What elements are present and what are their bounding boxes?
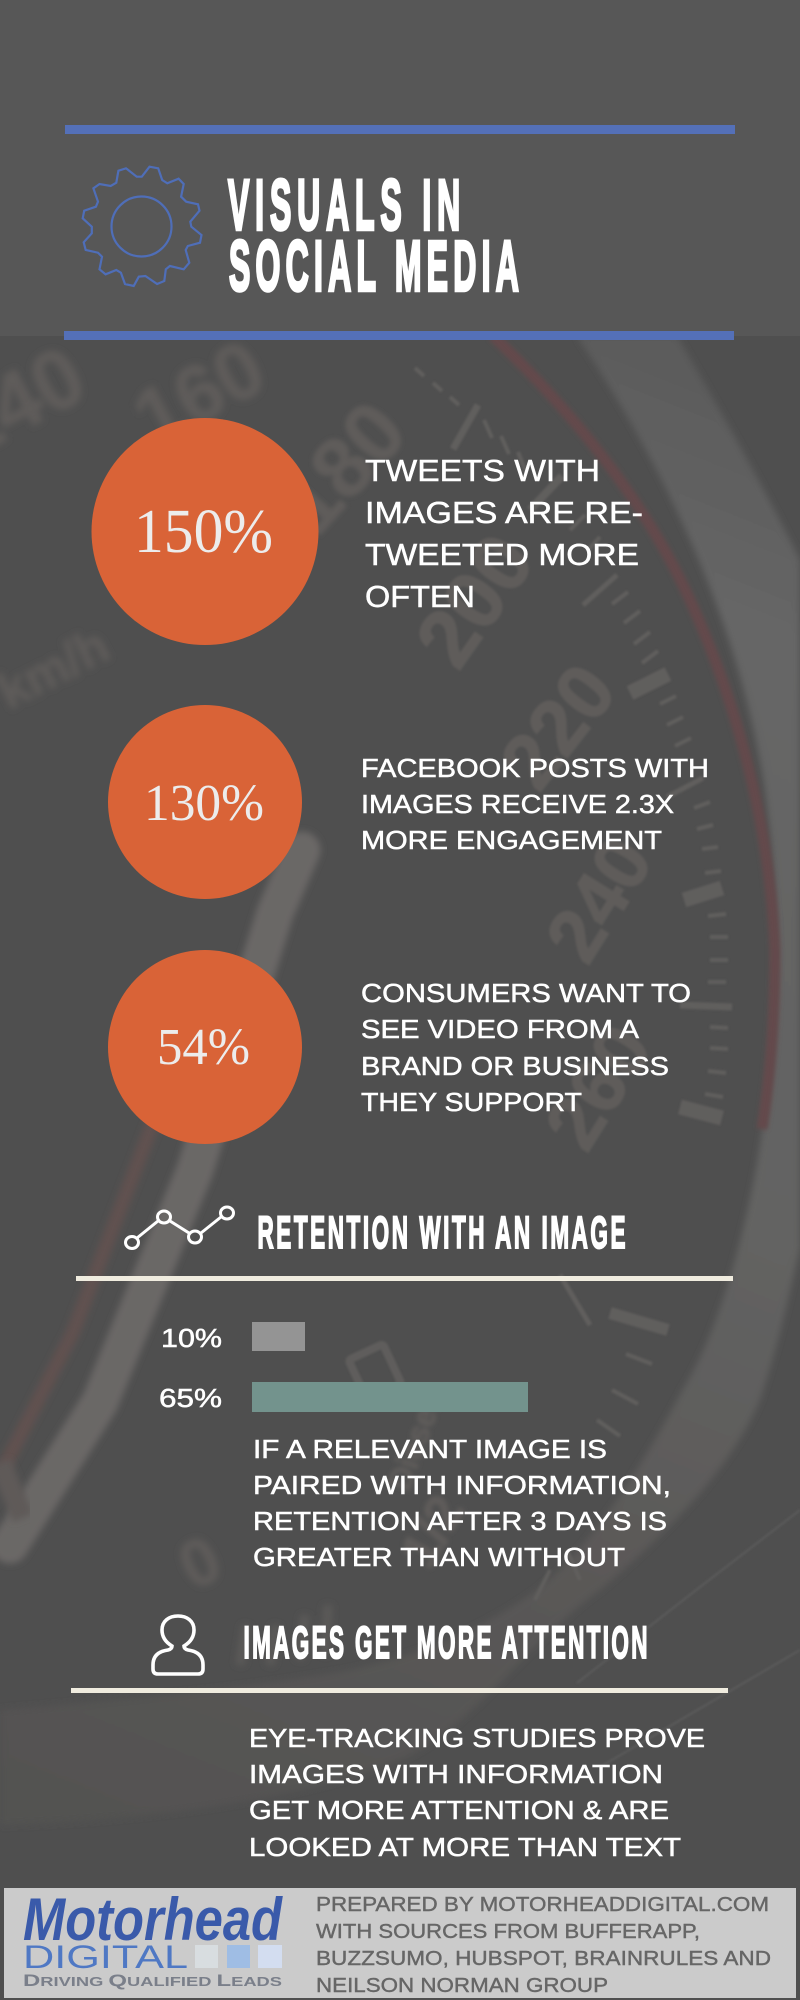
text: facebook: IMAGES RECEIVE 2.3X	[361, 789, 674, 819]
text: retention explanation: GREATER THAN WITHOUT	[253, 1542, 625, 1572]
figure 150%: 150%	[134, 498, 273, 566]
text: consumers: THEY SUPPORT	[361, 1087, 582, 1117]
text: facebook: MORE ENGAGEMENT	[361, 825, 662, 855]
text: credits: NEILSON NORMAN GROUP	[316, 1975, 608, 1997]
text: consumers: BRAND OR BUSINESS	[361, 1051, 669, 1081]
text: eye-tracking: GET MORE ATTENTION & ARE	[249, 1795, 669, 1825]
text: retention explanation: RETENTION AFTER 3 DAYS IS	[253, 1506, 667, 1536]
background: blurred speedometer dial: 220	[483, 648, 632, 805]
background: blurred speedometer dial: 0	[167, 1521, 232, 1603]
heading: retention with an image: RETENTION WITH AN IMAGE	[258, 1208, 625, 1258]
background: blurred speedometer dial: 1/2	[389, 1486, 476, 1577]
background: blurred speedometer dial: 260	[529, 1011, 668, 1163]
section: attention	[71, 1616, 728, 1862]
text: retention explanation	[253, 1434, 671, 1572]
text: facebook: FACEBOOK POSTS WITH	[361, 753, 709, 783]
text: retention explanation: IF A RELEVANT IMAGE IS	[253, 1434, 607, 1464]
header band	[0, 0, 800, 340]
logo: Motorhead Digital: D RIVING Q UALIFIED L EADS	[23, 1971, 282, 1990]
logo: Motorhead Digital: DIGITAL	[23, 1939, 188, 1975]
stat: 130%	[108, 705, 709, 899]
text: consumers: SEE VIDEO FROM A	[361, 1014, 640, 1044]
rule	[76, 1276, 733, 1281]
icon: line chart	[126, 1207, 234, 1248]
section: retention	[76, 1207, 733, 1572]
text: consumers: CONSUMERS WANT TO	[361, 978, 691, 1008]
heading: images get more attention: IMAGES GET MORE ATTENTION	[244, 1618, 648, 1668]
text: tweets	[365, 453, 643, 614]
footer panel	[4, 1886, 796, 1998]
text: credits: WITH SOURCES FROM BUFFERAPP,	[316, 1921, 700, 1943]
text: eye-tracking	[249, 1723, 705, 1862]
text: credits: BUZZSUMO, HUBSPOT, BRAINRULES AND	[316, 1948, 771, 1970]
text: tweets: IMAGES ARE RE-	[365, 495, 643, 530]
text: eye-tracking: IMAGES WITH INFORMATION	[249, 1759, 663, 1789]
background: blurred speedometer dial: 200	[398, 518, 551, 683]
figure 54%: 54%	[157, 1019, 250, 1076]
orange circle 54%	[108, 950, 302, 1144]
background: blurred speedometer dial: 180	[260, 384, 424, 551]
icon: person	[153, 1616, 203, 1674]
bottom blue bar	[64, 331, 734, 340]
text: tweets: TWEETED MORE	[365, 537, 639, 572]
orange circle 150%	[92, 418, 318, 645]
text: credits	[316, 1894, 771, 1997]
bar chart	[159, 1322, 528, 1413]
text: tweets: OFTEN	[365, 579, 475, 614]
text: retention explanation: PAIRED WITH INFORMATION,	[253, 1470, 671, 1500]
stat: 54%	[108, 950, 691, 1144]
title: SOCIAL MEDIA	[229, 226, 519, 306]
orange circle 130%	[108, 705, 302, 899]
background: blurred speedometer dial: 240	[530, 823, 669, 976]
background: blurred speedometer dial: Diesel	[381, 1394, 447, 1495]
stat: 150%	[92, 418, 643, 645]
logo: Motorhead Digital: Motorhead	[23, 1886, 283, 1953]
icon: gear	[83, 167, 202, 286]
bar 65%	[252, 1382, 528, 1412]
text: tweets: TWEETS WITH	[365, 453, 600, 488]
text: eye-tracking: EYE-TRACKING STUDIES PROVE	[249, 1723, 705, 1753]
background: blurred speedometer dial: 160	[119, 322, 279, 463]
title: VISUALS IN	[228, 165, 460, 245]
text: facebook	[361, 753, 709, 855]
label 65%: 65%	[159, 1383, 222, 1413]
bar 10%	[252, 1322, 305, 1351]
text: consumers	[361, 978, 691, 1117]
top blue bar	[65, 125, 735, 134]
text: eye-tracking: LOOKED AT MORE THAN TEXT	[249, 1832, 681, 1862]
label 10%: 10%	[161, 1323, 222, 1353]
rule	[71, 1688, 728, 1693]
logo: Motorhead Digital	[23, 1886, 283, 1990]
title	[228, 165, 519, 306]
figure 130%: 130%	[144, 775, 264, 832]
text: credits: PREPARED BY MOTORHEADDIGITAL.COM	[316, 1894, 769, 1916]
